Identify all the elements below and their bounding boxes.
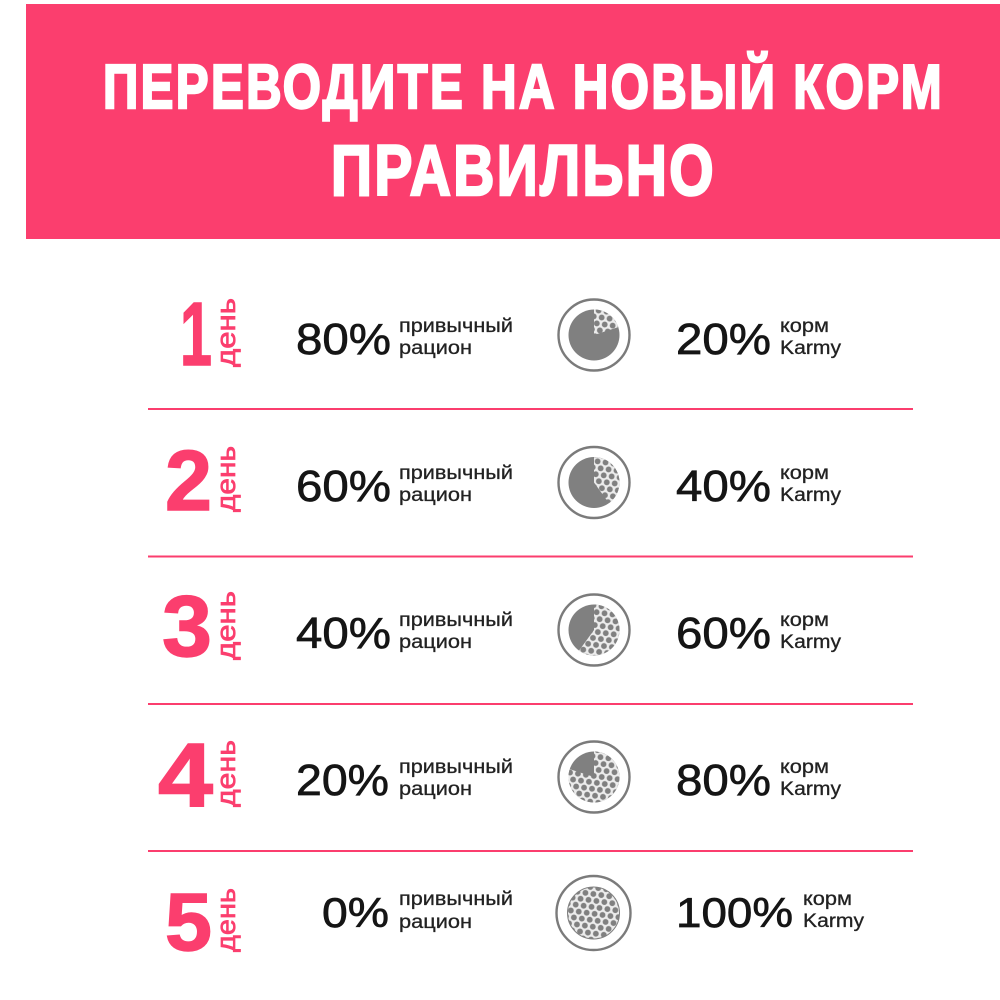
percent old food: 20% (296, 756, 389, 805)
label old food: привычный (399, 756, 513, 778)
percent new food: 100% (676, 889, 793, 936)
label old food: привычный (399, 462, 513, 484)
divider (148, 850, 913, 852)
label old food: рацион (399, 778, 472, 800)
label new food: корм (780, 609, 829, 631)
label new food: корм (780, 462, 829, 484)
day number 3: 3 (162, 579, 212, 675)
day number 5: 5 (165, 877, 212, 968)
percent old food: 60% (296, 462, 391, 511)
percent old food: 0% (322, 889, 389, 936)
divider (148, 703, 913, 705)
percent old food: 80% (296, 315, 391, 364)
label old food: привычный (399, 609, 513, 631)
percent new food: 20% (676, 315, 771, 364)
label old food: привычный (399, 315, 513, 337)
day number 2: 2 (165, 434, 212, 529)
percent old food: 40% (296, 609, 391, 658)
label old food: рацион (399, 631, 472, 653)
divider (148, 556, 913, 558)
row: day 2 (165, 434, 841, 529)
day label: день (211, 446, 241, 512)
label new food: Karmy (780, 631, 841, 653)
day number 4: 4 (158, 726, 213, 826)
day label: день (211, 591, 241, 660)
title banner (26, 4, 1000, 239)
percent new food: 80% (676, 756, 771, 805)
row: day 5 (165, 876, 864, 968)
label old food: рацион (399, 484, 472, 506)
label old food: рацион (399, 911, 472, 933)
day label: день (211, 740, 241, 807)
day number 1: 1 (180, 285, 212, 385)
row: day 3 (162, 579, 841, 675)
label new food: Karmy (780, 778, 841, 800)
pie: 20 percent (558, 300, 630, 370)
row: day 4 (158, 726, 841, 826)
day label: день (211, 298, 241, 367)
pie: 100 percent (556, 876, 630, 950)
title line 2: ПРАВИЛЬНО (331, 132, 716, 211)
percent new food: 60% (676, 609, 771, 658)
label old food: рацион (399, 337, 472, 359)
pie: 80 percent (558, 742, 630, 812)
row: day 1 (180, 285, 841, 385)
label new food: Karmy (803, 910, 864, 932)
pie: 40 percent (558, 447, 630, 518)
label new food: Karmy (780, 484, 841, 506)
label new food: корм (803, 888, 852, 910)
percent new food: 40% (676, 462, 771, 511)
label new food: Karmy (780, 337, 841, 359)
pie: 60 percent (558, 594, 630, 666)
label new food: корм (780, 315, 829, 337)
day label: день (211, 888, 241, 952)
label new food: корм (780, 756, 829, 778)
label old food: привычный (399, 888, 513, 910)
divider (148, 408, 913, 410)
